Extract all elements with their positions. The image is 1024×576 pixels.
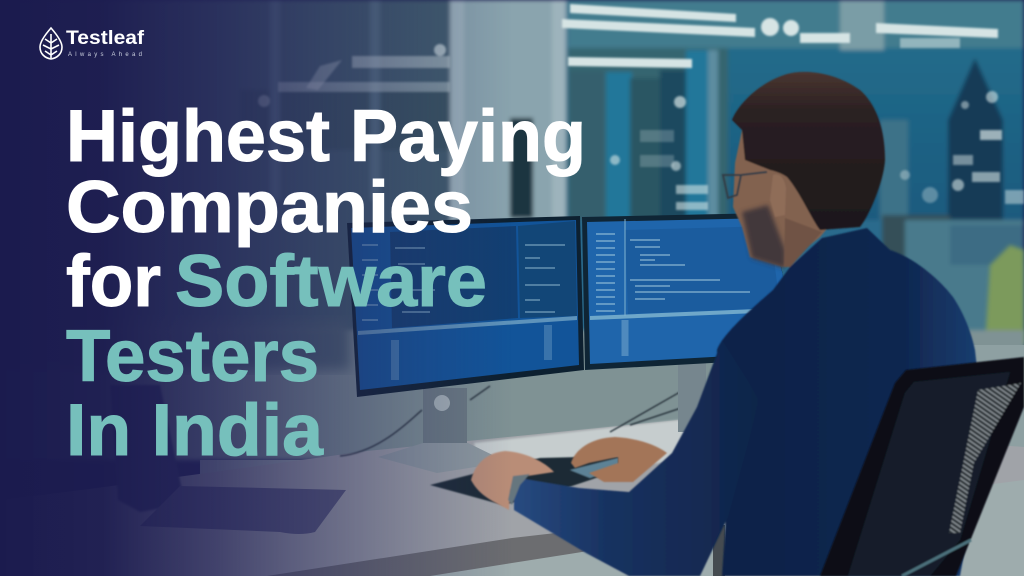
tagline: Always Ahead <box>68 52 142 58</box>
right hand <box>571 437 667 482</box>
office chair <box>820 357 1024 576</box>
ear <box>770 175 786 217</box>
floor and desk <box>0 320 1024 576</box>
window wall <box>568 0 1024 220</box>
sleeve <box>514 340 760 576</box>
title <box>66 96 586 471</box>
title: Companies <box>66 167 473 248</box>
tablet on desk <box>140 486 346 534</box>
glasses <box>723 172 767 198</box>
bokeh lights <box>258 4 1024 210</box>
man <box>471 72 985 576</box>
title: Software <box>175 241 487 322</box>
office background <box>0 0 1024 400</box>
left hand <box>471 451 554 510</box>
neck shade <box>784 218 822 267</box>
logo <box>40 28 145 59</box>
title: Testers <box>66 316 319 397</box>
title: for <box>66 241 161 322</box>
title: In India <box>66 390 324 471</box>
left monitor <box>347 216 584 473</box>
hair <box>732 72 885 230</box>
torso <box>717 228 985 576</box>
title: Highest Paying <box>66 96 586 177</box>
cables <box>340 386 690 456</box>
right monitor <box>582 213 800 432</box>
keyboard <box>430 456 622 505</box>
pillar <box>450 0 566 225</box>
phone on desk <box>110 385 182 512</box>
brand name: Testleaf <box>66 28 145 49</box>
plant <box>985 245 1024 345</box>
beard <box>742 205 785 268</box>
neck and face <box>733 120 860 267</box>
watch <box>508 474 530 505</box>
icon: leaf <box>40 28 62 59</box>
skyline towers <box>948 58 1003 240</box>
